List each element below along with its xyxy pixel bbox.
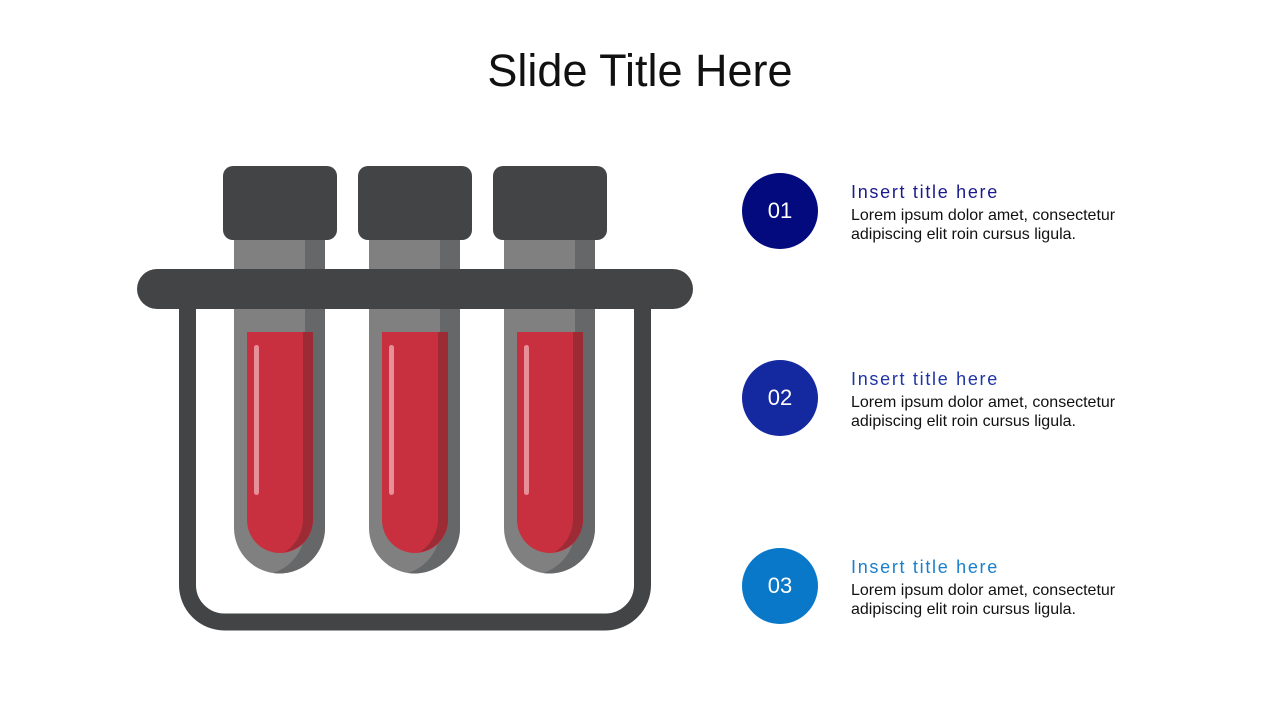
title: Slide Title Here (487, 45, 793, 96)
text 02: Lorem ipsum dolor amet, consectetur (851, 394, 1115, 411)
badge 02: 02 (768, 385, 792, 410)
heading 01: Insert title here (851, 182, 999, 202)
tube 3 (493, 166, 607, 574)
item 03 (742, 548, 1115, 624)
text 03: Lorem ipsum dolor amet, consectetur (851, 582, 1115, 599)
tube 2 (358, 166, 472, 574)
text 02 (851, 394, 1115, 430)
badge 02 (742, 360, 818, 436)
badge 01 (742, 173, 818, 249)
tube 1 (223, 166, 337, 574)
heading 02: Insert title here (851, 369, 999, 389)
text 03: adipiscing elit roin cursus ligula. (851, 601, 1076, 618)
item 01 (742, 173, 1115, 249)
text 03 (851, 582, 1115, 618)
badge 03 (742, 548, 818, 624)
rack frame (188, 300, 642, 622)
text 01 (851, 207, 1115, 243)
heading 03: Insert title here (851, 557, 999, 577)
badge 01: 01 (768, 198, 792, 223)
badge 03: 03 (768, 573, 792, 598)
text 01: adipiscing elit roin cursus ligula. (851, 226, 1076, 243)
item 02 (742, 360, 1115, 436)
rack top bar (137, 269, 693, 309)
text 02: adipiscing elit roin cursus ligula. (851, 413, 1076, 430)
text 01: Lorem ipsum dolor amet, consectetur (851, 207, 1115, 224)
